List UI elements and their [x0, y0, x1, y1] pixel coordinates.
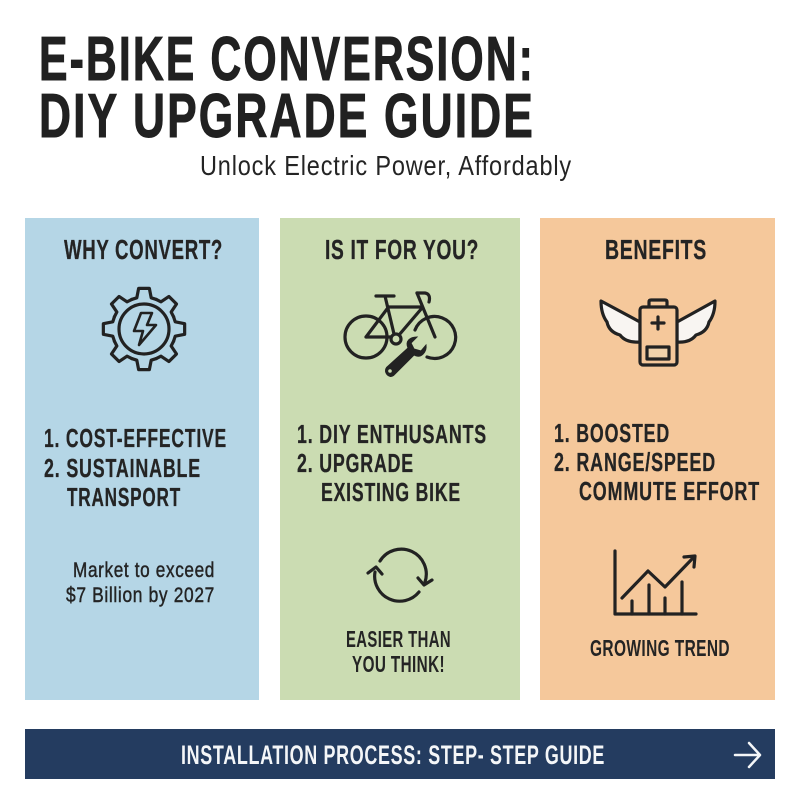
- panel: is it for you: [280, 218, 520, 700]
- list: why convert: 2. SUSTAINABLE: [44, 453, 201, 483]
- title: DIY UPGRADE GUIDE: [39, 82, 535, 151]
- callout: easier than you think: EASIER THAN: [346, 626, 451, 652]
- list: is it for you: 1. DIY ENTHUSANTS: [297, 419, 487, 449]
- list: is it for you: EXISTING BIKE: [321, 477, 461, 507]
- title: [39, 25, 535, 151]
- heading: why convert: WHY CONVERT?: [64, 234, 223, 265]
- icon: right arrow: [735, 743, 760, 767]
- icon: growth chart: [615, 551, 696, 614]
- callout: easier than you think: YOU THINK!: [352, 651, 445, 677]
- heading: benefits: BENEFITS: [605, 234, 707, 265]
- list: is it for you: 2. UPGRADE: [297, 448, 414, 478]
- panel: why convert: [25, 218, 259, 700]
- list: why convert: 1. COST-EFFECTIVE: [44, 423, 227, 453]
- callout: easier than you think: [346, 626, 451, 677]
- subtitle: Unlock Electric Power, Affordably: [200, 150, 572, 181]
- heading: is it for you: IS IT FOR YOU?: [325, 234, 479, 265]
- title: E-BIKE CONVERSION:: [39, 25, 535, 94]
- panel: benefits: [540, 218, 775, 700]
- list: why convert: [44, 423, 227, 512]
- list: benefits: [554, 418, 760, 506]
- icon: battery with wings: [601, 300, 715, 365]
- label: growing trend: GROWING TREND: [590, 635, 730, 661]
- icon: bicycle with wrench: [345, 293, 456, 376]
- icon: gear with lightning bolt: [103, 288, 185, 370]
- list: benefits: 2. RANGE/SPEED: [554, 447, 716, 477]
- market statistic: $7 Billion by 2027: [66, 584, 215, 607]
- list: why convert: TRANSPORT: [67, 482, 181, 512]
- market statistic: Market to exceed: [73, 559, 215, 582]
- icon: refresh arrows: [368, 549, 432, 601]
- list: benefits: 1. BOOSTED: [554, 418, 670, 448]
- list: is it for you: [297, 419, 487, 507]
- banner: installation process: [25, 729, 775, 779]
- banner text: INSTALLATION PROCESS: STEP- STEP GUIDE: [181, 740, 605, 770]
- market statistic: [66, 559, 215, 607]
